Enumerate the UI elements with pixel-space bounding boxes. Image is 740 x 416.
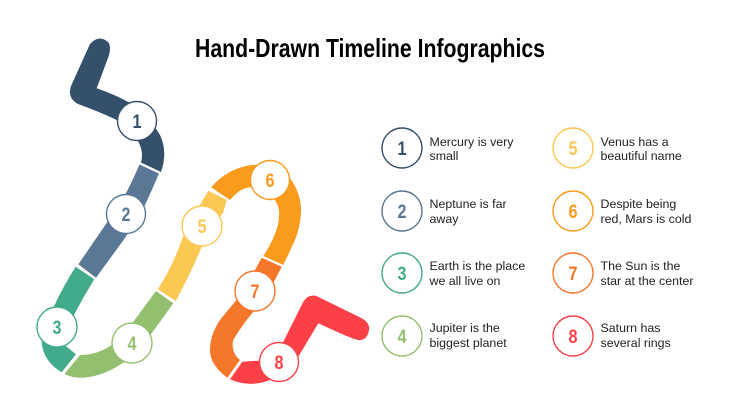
marker 7 bbox=[235, 271, 275, 311]
segment 3 bbox=[42, 267, 94, 372]
legend item 8: several rings bbox=[600, 336, 671, 350]
segment 6 bbox=[211, 165, 301, 265]
legend item 7 bbox=[553, 253, 693, 293]
marker 8: 8 bbox=[274, 353, 284, 374]
marker 6: 6 bbox=[266, 171, 274, 192]
segment 4 bbox=[64, 291, 173, 378]
legend item 4 bbox=[382, 316, 507, 356]
marker 2 bbox=[106, 194, 146, 234]
marker 5: 5 bbox=[198, 217, 207, 238]
legend item 5: 5 bbox=[568, 139, 578, 160]
legend item 5 bbox=[553, 128, 682, 168]
marker 1: 1 bbox=[132, 112, 142, 133]
legend item 6: 6 bbox=[568, 202, 578, 223]
segment 8 bbox=[230, 295, 369, 384]
marker 3 bbox=[37, 307, 77, 347]
legend item 1 bbox=[382, 128, 514, 168]
legend item 6: Despite being bbox=[600, 197, 676, 211]
legend item 2: away bbox=[430, 212, 459, 226]
legend item 4: 4 bbox=[398, 327, 407, 348]
legend item 2 bbox=[382, 191, 507, 231]
legend item 4: biggest planet bbox=[430, 336, 507, 350]
legend item 1: Mercury is very bbox=[430, 135, 514, 149]
hand-drawn timeline path bbox=[37, 38, 369, 384]
legend item 7: 7 bbox=[568, 264, 578, 285]
legend item 8: 8 bbox=[568, 327, 578, 348]
legend item 2: Neptune is far bbox=[430, 197, 507, 211]
marker 6 bbox=[250, 160, 290, 200]
marker 4 bbox=[112, 323, 152, 363]
legend item 3 bbox=[382, 253, 525, 293]
segment 5 bbox=[158, 191, 227, 301]
legend item 8 bbox=[553, 316, 671, 356]
marker 1 bbox=[118, 102, 156, 140]
legend item 2: 2 bbox=[398, 202, 406, 223]
legend item 3: Earth is the place bbox=[430, 259, 525, 273]
legend item 3: 3 bbox=[398, 264, 406, 285]
legend item 7: star at the center bbox=[600, 274, 693, 288]
marker 8 bbox=[260, 342, 298, 382]
legend item 8: Saturn has bbox=[600, 321, 660, 335]
marker 5 bbox=[182, 206, 222, 246]
segment 2 bbox=[78, 164, 159, 278]
legend item 4: Jupiter is the bbox=[430, 321, 500, 335]
legend item 1: 1 bbox=[398, 139, 407, 160]
marker 4: 4 bbox=[128, 334, 137, 355]
legend item 6: red, Mars is cold bbox=[600, 212, 691, 226]
marker 3: 3 bbox=[52, 318, 62, 339]
title: Hand-Drawn Timeline Infographics bbox=[195, 33, 545, 63]
marker 7: 7 bbox=[250, 282, 260, 303]
legend item 5: beautiful name bbox=[600, 149, 682, 163]
legend item 3: we all live on bbox=[428, 274, 501, 288]
legend item 1: small bbox=[430, 149, 458, 163]
legend item 5: Venus has a bbox=[600, 135, 669, 149]
segment 7 bbox=[210, 258, 282, 378]
segment 1 bbox=[70, 38, 164, 172]
legend item 7: The Sun is the bbox=[600, 259, 681, 273]
legend item 6 bbox=[553, 191, 691, 231]
marker 2: 2 bbox=[122, 205, 130, 226]
